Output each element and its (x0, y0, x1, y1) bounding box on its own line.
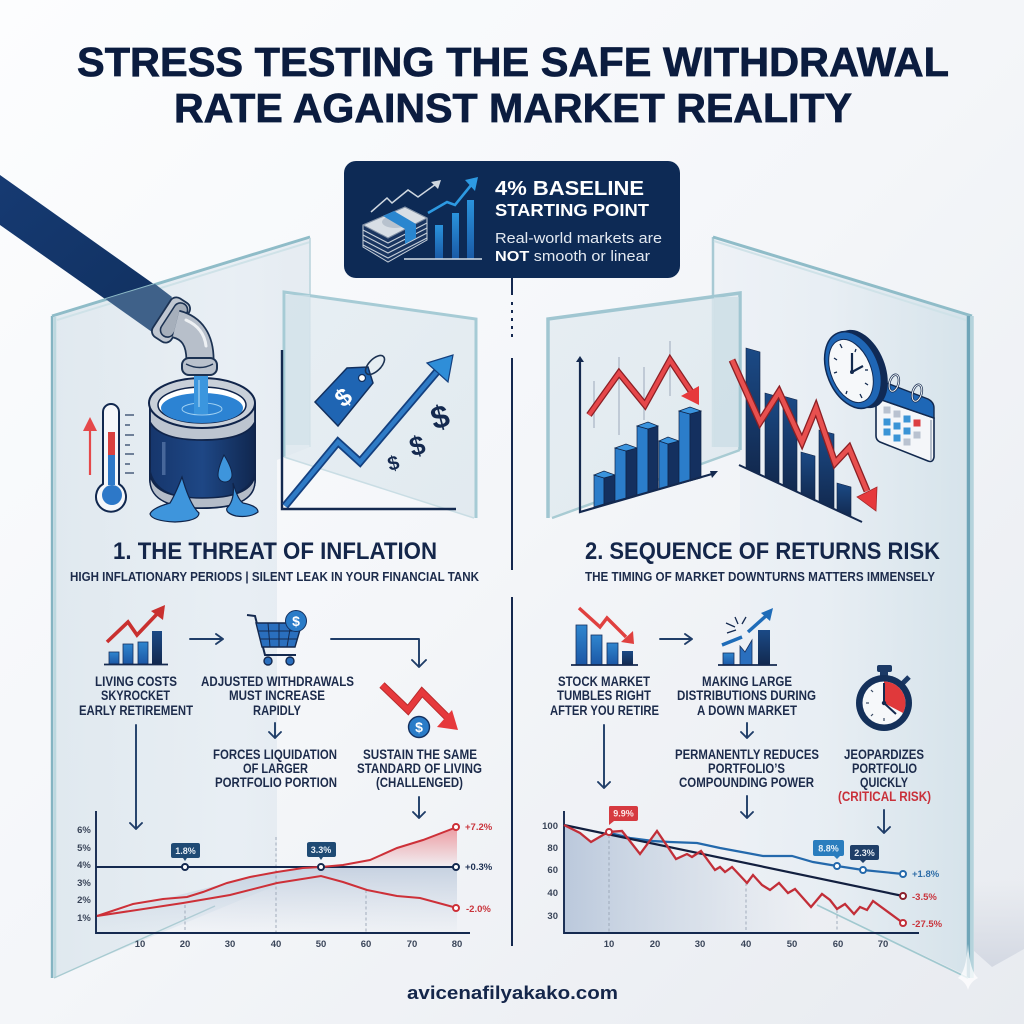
icon: broken bars (718, 608, 777, 665)
text: living costs (79, 674, 194, 718)
end labels (912, 869, 943, 930)
axis labels: 30 (547, 911, 558, 922)
text: sustain standard of living (357, 747, 482, 790)
heading: the threat of inflation: 1. THE THREAT OF INFLATION (113, 538, 437, 565)
line chart: inflation (77, 811, 493, 950)
subheading: sequence: THE TIMING OF MARKET DOWNTURNS MATTERS IMMENSELY (585, 569, 935, 584)
icon: shopping cart (247, 610, 306, 665)
arrow (190, 634, 223, 644)
center divider (511, 278, 513, 946)
icon: calendar (876, 374, 934, 462)
icon: stopwatch (856, 665, 912, 731)
callout text: 4% BASELINE (495, 177, 644, 200)
text: stock market (550, 674, 659, 718)
callout text (495, 177, 662, 265)
text: forces liquidation: OF LARGER (243, 761, 308, 776)
chart shading (97, 827, 457, 933)
icon: price tag: $ (329, 383, 358, 413)
axis labels: 80 (452, 939, 462, 950)
callouts (609, 806, 879, 863)
icon: pipe elbow and coupling (106, 284, 217, 375)
3D bars (594, 407, 701, 507)
callouts: 8.8% (818, 844, 839, 854)
heading: sequence of returns risk: 2. SEQUENCE OF RETURNS RISK (585, 538, 941, 565)
axis labels: 30 (695, 939, 705, 950)
axis labels (77, 825, 462, 950)
text: jeopardizes: PORTFOLIO (852, 761, 917, 776)
text: living costs: EARLY RETIREMENT (79, 703, 194, 718)
axis labels: 10 (135, 939, 145, 950)
end labels: -27.5% (912, 919, 943, 930)
axis labels: 20 (180, 939, 190, 950)
axis labels: 4% (77, 860, 91, 871)
icon: thermometer (83, 404, 134, 512)
axis labels: 20 (650, 939, 660, 950)
arrow (269, 723, 281, 738)
text: jeopardizes (838, 747, 931, 804)
text: stock market: STOCK MARKET (558, 674, 651, 689)
callouts: 1.8% (175, 846, 196, 856)
text: sustain standard of living: SUSTAIN THE SAME (363, 747, 477, 762)
icon: rising cost bars (104, 605, 168, 664)
end labels (465, 822, 493, 915)
callout text: STARTING POINT (495, 200, 649, 220)
background shadow at lower right (974, 880, 1024, 967)
axis labels: 3% (77, 878, 91, 889)
axis labels: 6% (77, 825, 91, 836)
markers (182, 824, 459, 911)
axis labels: 40 (547, 888, 558, 899)
text: stock market: TUMBLES RIGHT (557, 688, 652, 703)
icon: leaking tank (149, 376, 258, 522)
arrow (413, 797, 425, 818)
axis labels: 100 (542, 821, 558, 832)
arrow (130, 725, 142, 829)
icon: falling arrow and dollar (382, 685, 458, 738)
text: permanently reduces: PERMANENTLY REDUCES (675, 747, 819, 762)
text: adjusted withdrawals: ADJUSTED WITHDRAWALS (201, 674, 354, 689)
end labels: -3.5% (912, 892, 937, 903)
arrow (660, 634, 692, 644)
chart shading (564, 825, 811, 933)
text: permanently reduces (675, 747, 819, 790)
text: making large distributions (677, 674, 816, 718)
text: sustain standard of living: (CHALLENGED) (376, 775, 463, 790)
callouts (171, 842, 336, 861)
footer url: avicenafilyakako.com (407, 983, 618, 1003)
text: adjusted withdrawals (201, 674, 354, 718)
axis labels: 50 (316, 939, 326, 950)
text: making large distributions: DISTRIBUTIONS DURING (677, 688, 816, 703)
end labels: +0.3% (465, 862, 493, 873)
title: RATE AGAINST MARKET REALITY (174, 85, 852, 131)
axis labels: 70 (878, 939, 888, 950)
text: stock market: AFTER YOU RETIRE (550, 703, 659, 718)
axis labels: 60 (547, 865, 558, 876)
title (77, 39, 949, 131)
text: adjusted withdrawals: RAPIDLY (253, 703, 301, 718)
callout text: NOT smooth or linear (495, 249, 650, 265)
axis labels: 30 (225, 939, 235, 950)
subheading: inflation: HIGH INFLATIONARY PERIODS | SILENT LEAK IN YOUR FINANCIAL TANK (70, 569, 480, 584)
icon: hose (0, 175, 172, 332)
decorative sparkle (958, 944, 978, 990)
end labels: +7.2% (465, 822, 493, 833)
text: jeopardizes: (CRITICAL RISK) (838, 789, 931, 804)
text: making large distributions: A DOWN MARKET (697, 703, 798, 718)
text: jeopardizes: JEOPARDIZES (844, 747, 924, 762)
end labels: -2.0% (466, 904, 491, 915)
icon: zigzag 3D bar chart (576, 341, 718, 512)
title: STRESS TESTING THE SAFE WITHDRAWAL (77, 39, 949, 85)
end labels: +1.8% (912, 869, 940, 880)
axis labels: 60 (361, 939, 371, 950)
callout text: Real-world markets are (495, 231, 662, 247)
icon: dollar signs: $ (385, 452, 402, 476)
icon: dollar signs: $ (406, 430, 428, 462)
axis labels: 60 (833, 939, 843, 950)
arrow (741, 796, 753, 818)
axis labels: 5% (77, 843, 91, 854)
line chart: sequence of returns (542, 806, 943, 950)
axis labels (542, 821, 888, 950)
axis labels: 80 (547, 843, 558, 854)
icon: shopping cart: $ (292, 613, 300, 629)
icon: price tag (315, 352, 388, 426)
text: forces liquidation: FORCES LIQUIDATION (213, 747, 337, 762)
arrow (598, 725, 610, 788)
panel: returns large glass pane (713, 236, 972, 978)
icon: falling arrow and dollar: $ (415, 719, 423, 735)
callouts: 9.9% (613, 808, 634, 818)
icon: tumbling bars (571, 608, 638, 665)
icon: dollar signs: $ (427, 397, 453, 437)
axis labels: 1% (77, 913, 91, 924)
text: forces liquidation: PORTFOLIO PORTION (215, 775, 337, 790)
callouts: 2.3% (854, 848, 875, 858)
callouts: 3.3% (311, 845, 331, 855)
icon: rising price chart (282, 350, 456, 509)
icon: dollar signs (385, 397, 453, 476)
arrow (331, 639, 426, 667)
icon: wall clock (814, 322, 899, 417)
text: living costs: LIVING COSTS (95, 674, 177, 689)
text: permanently reduces: COMPOUNDING POWER (679, 775, 814, 790)
panel: inflation large glass pane (52, 236, 310, 978)
markers (606, 829, 906, 926)
axis labels: 40 (271, 939, 281, 950)
panel: inflation small glass pane (284, 292, 476, 518)
panel: returns small glass pane (548, 292, 740, 518)
icon: cash stack with rising chart (363, 177, 482, 262)
text: sustain standard of living: STANDARD OF LIVING (357, 761, 482, 776)
text: jeopardizes: QUICKLY (860, 775, 908, 790)
arrow (878, 810, 890, 833)
icon: falling bars with red arrow (732, 348, 877, 522)
text: forces liquidation (213, 747, 337, 790)
arrow (741, 723, 753, 738)
text: adjusted withdrawals: MUST INCREASE (229, 688, 325, 703)
axis labels: 70 (407, 939, 417, 950)
callout: 4% baseline (344, 161, 680, 278)
axis labels: 10 (604, 939, 614, 950)
axis labels: 40 (741, 939, 751, 950)
axis labels: 50 (787, 939, 797, 950)
axis labels: 2% (77, 895, 91, 906)
text: making large distributions: MAKING LARGE (702, 674, 792, 689)
text: permanently reduces: PORTFOLIO’S (708, 761, 785, 776)
text: living costs: SKYROCKET (101, 688, 171, 703)
